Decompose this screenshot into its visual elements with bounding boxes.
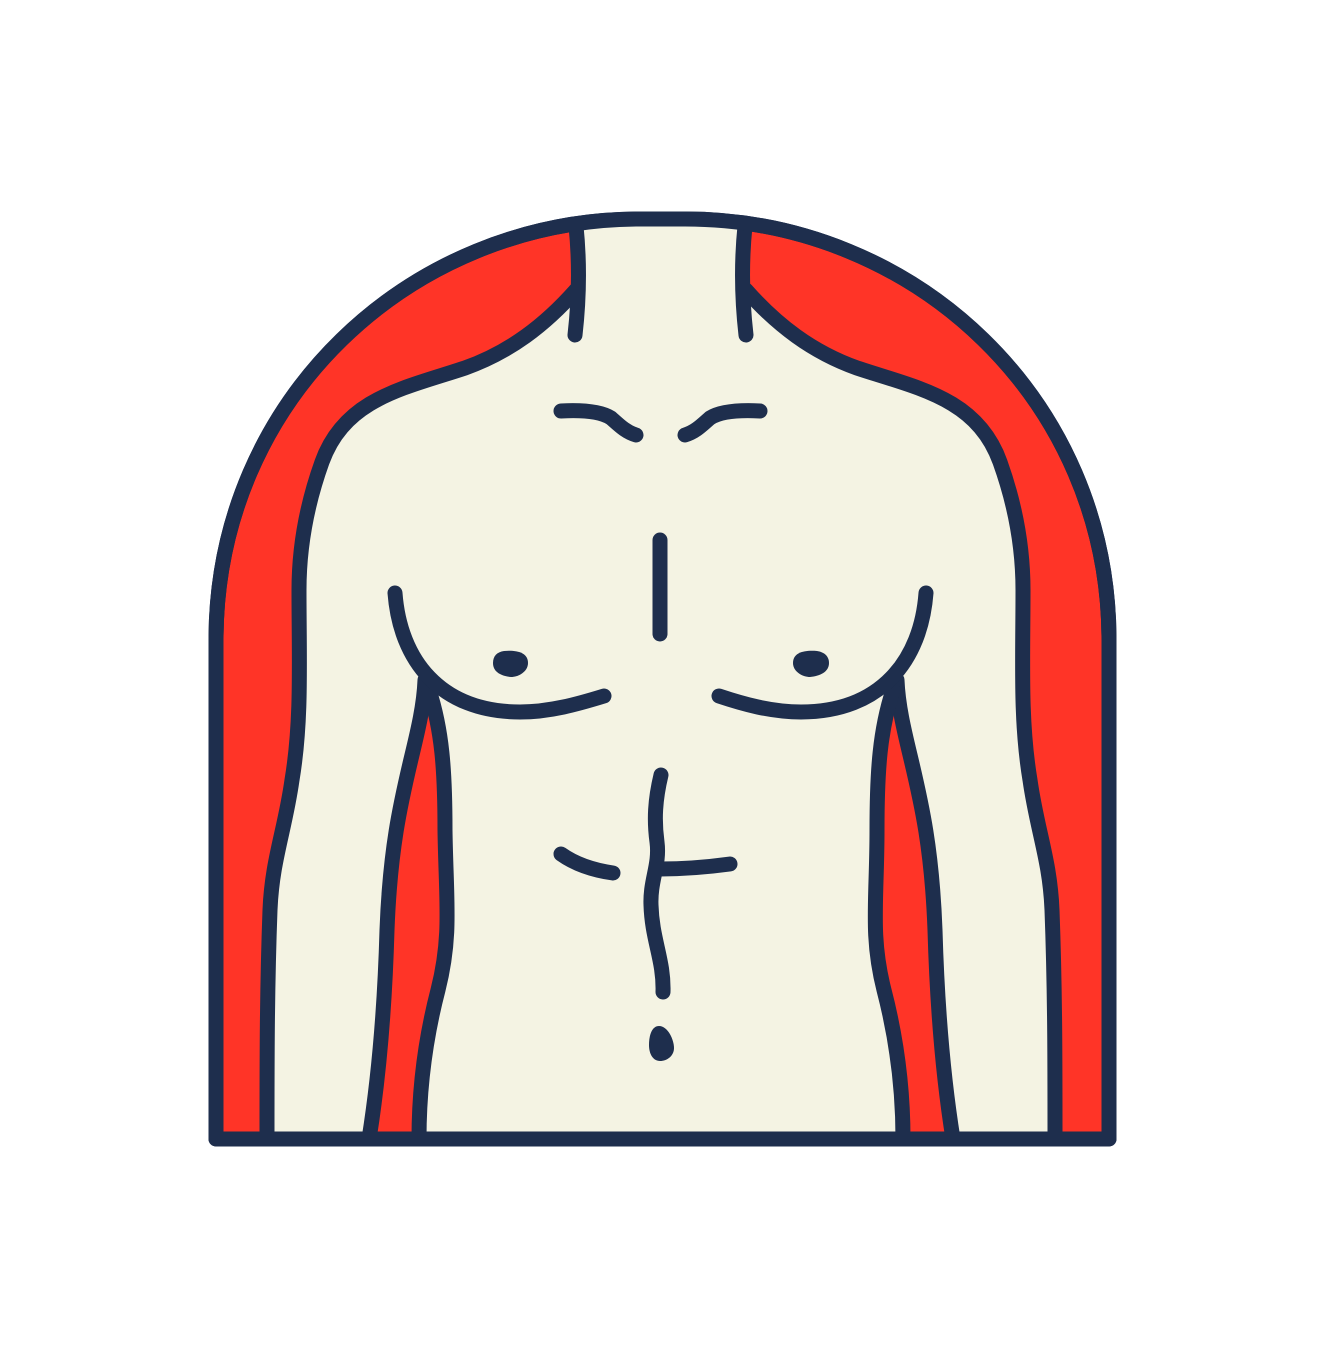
- navel: [649, 1026, 674, 1061]
- inner arm left: [369, 680, 425, 1139]
- right waist: [875, 690, 903, 1139]
- sternum: [652, 540, 668, 634]
- right shoulder and arm outline: [746, 290, 1055, 1139]
- arch frame: [216, 219, 1109, 1139]
- left pectoral: [395, 593, 604, 712]
- right nipple: [793, 651, 829, 677]
- neck left: [575, 226, 579, 335]
- abdominal left line: [561, 854, 613, 873]
- left shoulder and arm outline: [267, 290, 576, 1139]
- left collarbone: [561, 411, 636, 435]
- abdominal midline: [651, 775, 663, 992]
- torso body: [267, 226, 1055, 1139]
- left nipple: [493, 651, 528, 677]
- neck right: [742, 226, 746, 335]
- abdominal right line: [660, 864, 730, 869]
- body outlines: [267, 226, 1055, 1139]
- arched red background: [216, 219, 1109, 1139]
- right collarbone: [685, 411, 760, 435]
- left waist: [419, 690, 447, 1139]
- right pectoral: [719, 593, 926, 712]
- inner arm right: [897, 680, 953, 1139]
